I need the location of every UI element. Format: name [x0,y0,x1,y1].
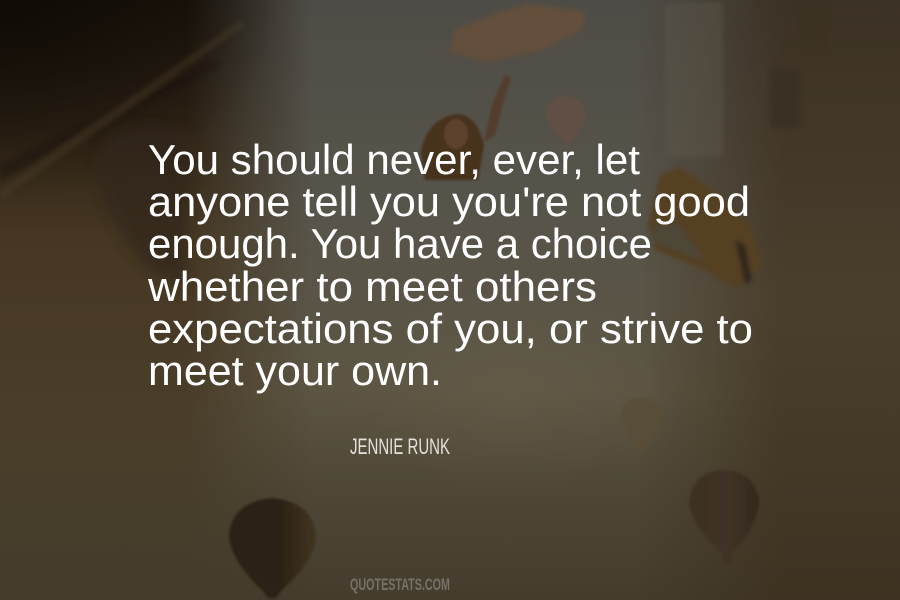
balloon: small faint [621,398,662,452]
background buildings [0,2,828,200]
quote text: enough. You have a choice [148,220,652,267]
large dark balloon shape left [97,125,190,285]
woman [421,75,511,180]
quote text: expectations of you, or strive to [148,305,753,352]
taxi shape right [648,167,763,288]
quote text: whether to meet others [147,263,597,310]
umbrella [450,4,585,62]
quote text [147,136,753,394]
balloon: bottom left [229,498,316,598]
small balloon top [545,96,586,144]
balloon: bottom right [689,470,759,563]
quote text: meet your own. [148,347,442,394]
quote text: anyone tell you you're not good [148,178,750,225]
watermark: QUOTESTATS.COM [350,575,450,594]
author: JENNIE RUNK [350,434,450,459]
quote text: You should never, ever, let [148,136,640,183]
